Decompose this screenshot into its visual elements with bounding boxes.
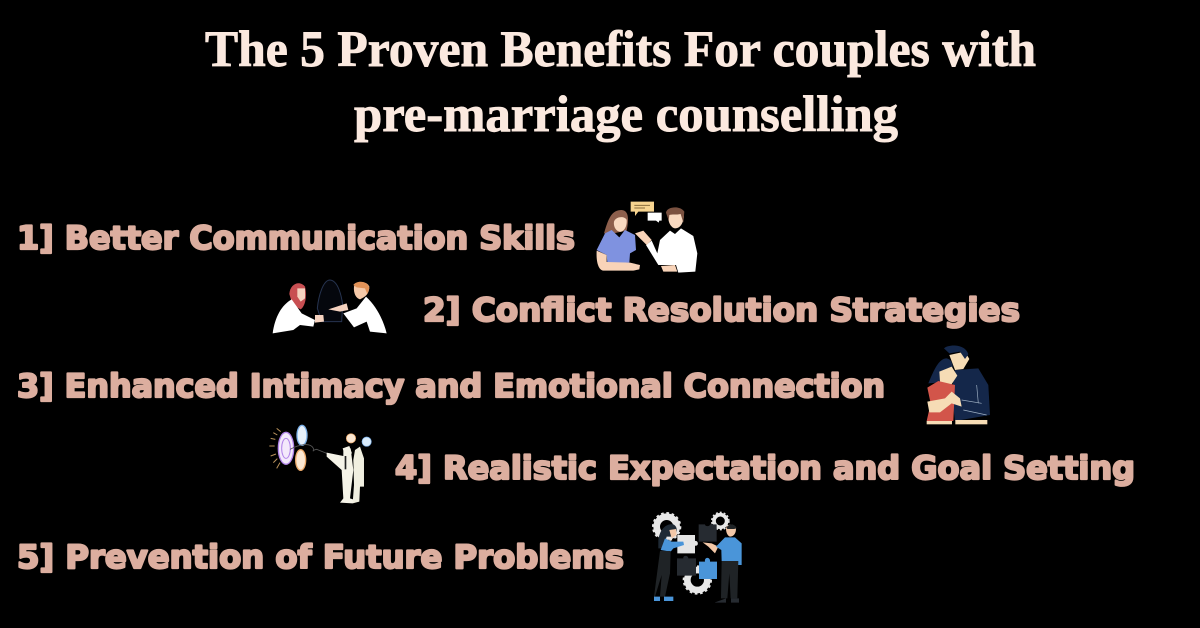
benefit 5 text: 5] Prevention of Future Problems [17, 538, 624, 576]
title [205, 22, 1036, 143]
icon: couple talking with speech bubbles [597, 202, 697, 273]
icon: two people pointing at targets [269, 425, 371, 503]
benefit 4 text: 4] Realistic Expectation and Goal Setting [395, 449, 1135, 487]
benefit 2 text: 2] Conflict Resolution Strategies [423, 291, 1020, 329]
benefit 3 text: 3] Enhanced Intimacy and Emotional Connection [17, 367, 885, 405]
title: pre-marriage counselling [354, 87, 898, 143]
benefit 1 text: 1] Better Communication Skills [17, 219, 575, 257]
icon: team assembling puzzle with gears [653, 512, 742, 603]
icon: couple with mediator [273, 280, 387, 333]
title: The 5 Proven Benefits For couples with [205, 22, 1036, 78]
icon: embracing couple [927, 346, 990, 424]
